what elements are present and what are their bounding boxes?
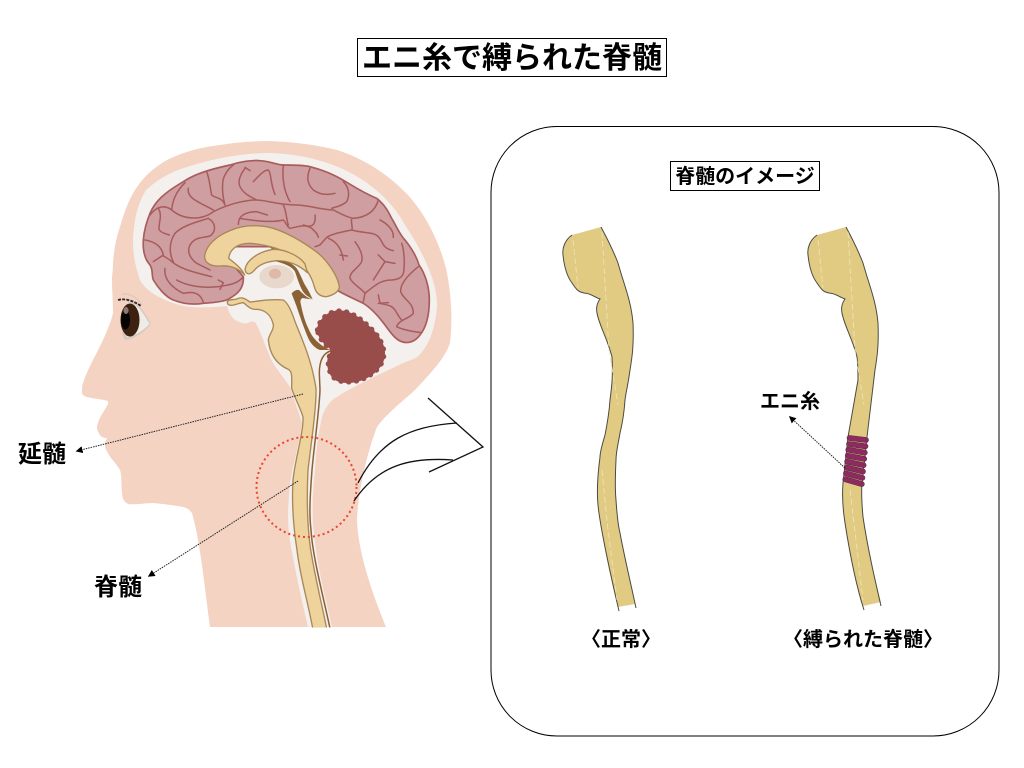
label: bound spinal cord: 〈縛られた脊髄〉 xyxy=(783,627,943,651)
neck bottom mask xyxy=(285,628,345,638)
callout lines: 延髄 xyxy=(18,394,303,468)
panel: spinal cord image xyxy=(491,126,999,736)
callout lines: 脊髄 xyxy=(94,481,298,601)
icon: eye xyxy=(118,294,151,340)
label: enishi thread with arrow xyxy=(760,390,845,468)
title: エニ糸で縛られた脊髄 xyxy=(362,42,662,75)
thalamus core xyxy=(269,269,281,279)
corpus callosum xyxy=(205,226,339,297)
panel heading: 脊髄のイメージ xyxy=(675,165,815,188)
normal spinal cord xyxy=(563,227,636,611)
cerebrum group xyxy=(143,161,429,630)
enishi thread bands xyxy=(845,438,866,484)
bound spinal cord xyxy=(808,227,881,610)
head illustration xyxy=(82,141,451,630)
midbrain lower xyxy=(292,290,331,350)
thalamus xyxy=(259,265,294,288)
callout lines: 脊髄: 脊髄 xyxy=(94,574,142,601)
fornix xyxy=(245,249,307,274)
cerebellum xyxy=(317,310,385,383)
cerebrum xyxy=(143,161,429,343)
midbrain upper xyxy=(275,261,313,299)
label: enishi thread with arrow: エニ糸 xyxy=(760,390,820,413)
highlight circle xyxy=(256,437,356,537)
label: normal: 〈正常〉 xyxy=(581,628,661,651)
head skin silhouette xyxy=(82,141,451,627)
brainstem and spinal cord xyxy=(227,298,327,630)
cerebral sulci xyxy=(145,165,422,333)
skull and spinal canal cavity xyxy=(133,153,437,627)
central tract line xyxy=(310,351,332,630)
zoom arrow lines xyxy=(354,398,483,501)
callout lines: 延髄: 延髄 xyxy=(18,441,66,468)
